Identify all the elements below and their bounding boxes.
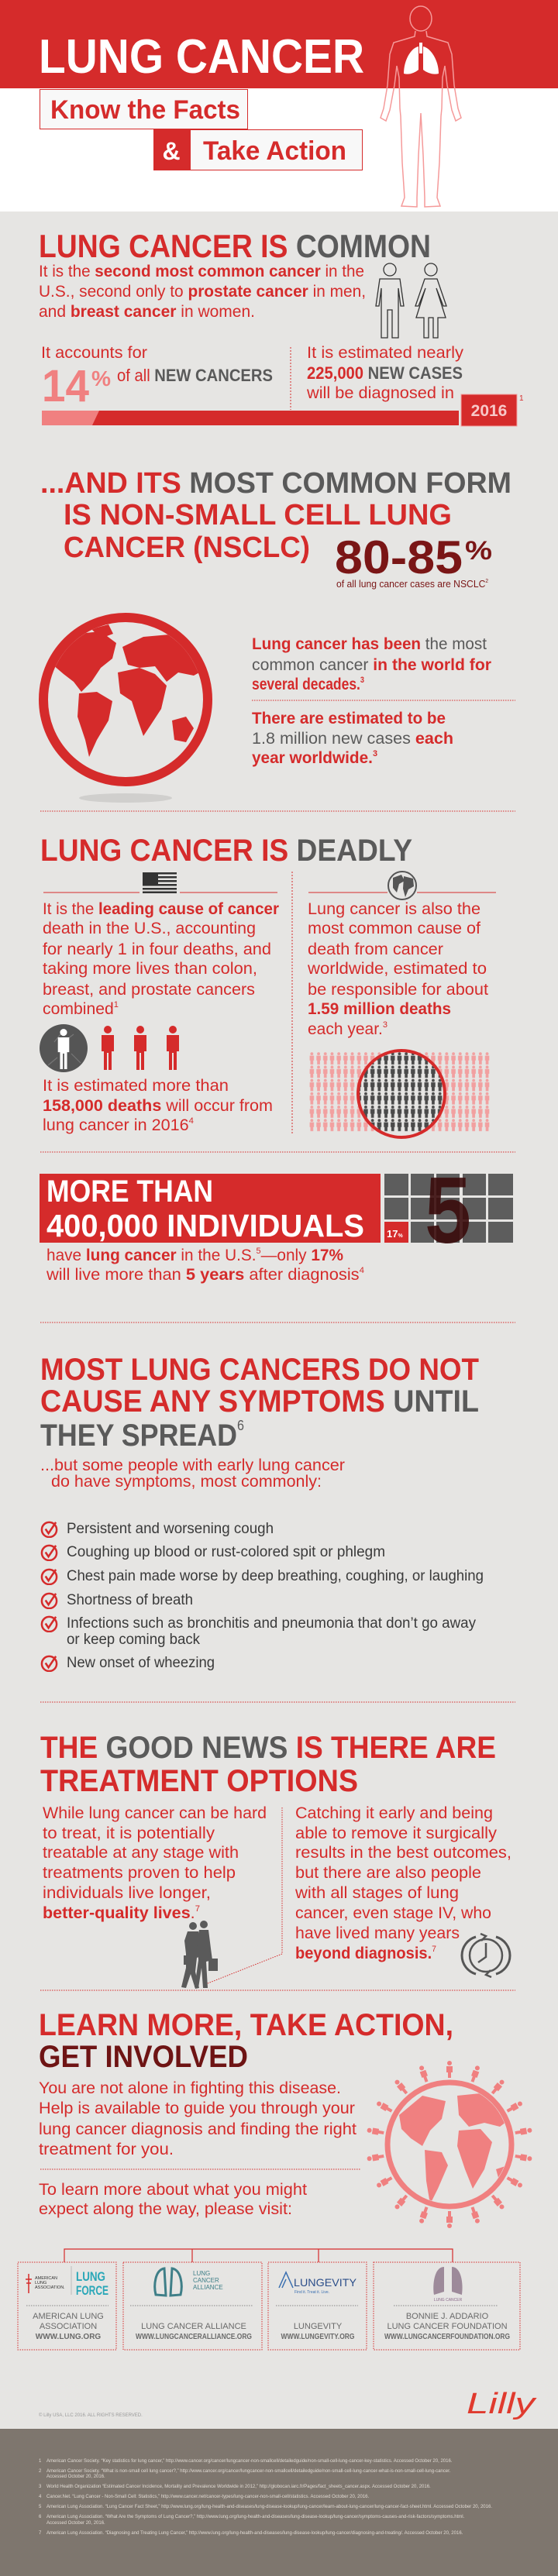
org box: Lung Cancer Alliance: WWW.LUNGCANCERALLIANCE.ORG [136,2333,252,2341]
org box: American Lung Association: LUNG [35,2281,46,2285]
text: leading cause of cancer death in US: for nearly 1 in four deaths, and [43,941,271,958]
text: second most common [39,263,366,321]
text: 1.8 million new cases: year worldwide. [252,749,374,767]
text: catching it early: Catching it early and being [295,1804,493,1822]
subtitle box: & Take Action [153,129,363,170]
heading: lung cancer is deadly: LUNG CANCER IS DEADLY [40,834,412,868]
icon: US flag [43,872,277,893]
org box: LUNGevity [268,2262,367,2350]
copyright: © Lilly USA, LLC 2016. ALL RIGHTS RESERVED. [39,2413,143,2418]
references: 6 [39,2515,42,2519]
heading: NSCLC [40,467,512,564]
heading: learn more [39,2008,453,2074]
text: 17% survive 5 years: —only [261,1247,311,1264]
text: catching it early: beyond diagnosis. [295,1945,432,1962]
text: potentially treatable: better-quality lives. [43,1904,195,1922]
org box: American Lung Association: FORCE [76,2283,108,2298]
heading: good news [40,1731,496,1798]
references: Cancer.Net. “Lung Cancer - Non-Small Cell: Statistics,” http://www.cancer.net/cancer-types/lung-cancer-non-small-cell/statistics. Accessed October 20, 2016. [46,2495,370,2499]
text: catching it early: able to remove it surgically [295,1825,498,1842]
text: second most common: It is the second most common cancer in the [39,263,364,280]
org box: American Lung Association [18,2262,116,2350]
text: 158,000 deaths: 4 [189,1116,194,1126]
text: potentially treatable: While lung cancer can be hard [43,1804,267,1822]
subtitle box: Know the Facts: Know the Facts [50,95,240,125]
text: some have symptoms [40,1457,345,1491]
text: potentially treatable: treatable at any stage with [43,1844,239,1862]
stat: 14% of new cancers: 14 [42,361,89,411]
org box: Lung Cancer Alliance: LUNG [193,2270,210,2277]
references: 3 [39,2485,42,2489]
org box: Lung Cancer Alliance: CANCER [193,2277,219,2284]
text: catching it early: 7 [432,1945,436,1954]
list: symptoms: Chest pain made worse by deep breathing, coughing, or laughing [67,1568,484,1584]
stat: 14% of new cancers: % [91,366,111,390]
list: symptoms: New onset of wheezing [67,1655,215,1671]
stat: 80-85%: % [465,536,492,566]
text: most common cancer in world [252,635,491,693]
org box: Bonnie J. Addario Lung Cancer Foundation: WWW.LUNGCANCERFOUNDATION.ORG [384,2333,510,2341]
text: you are not alone [39,2079,356,2158]
text: you are not alone: You are not alone in fighting this disease. [39,2079,341,2097]
references: Accessed October 20, 2016. [46,2475,105,2479]
org box: American Lung Association: AMERICAN LUNG [33,2312,104,2321]
chart: population grid with highlighted circle [308,1051,491,1137]
text: 158,000 deaths [43,1077,273,1134]
org box: LUNGevity: Find it. Treat it. Live. [294,2290,329,2295]
heading: good news: TREATMENT OPTIONS [40,1764,358,1798]
badge: 2016: 1 [519,394,524,403]
org box: LUNGevity: LUNGEVITY [294,2322,343,2331]
references: American Cancer Society. “What is non-small cell lung cancer?,” http://www.cancer.org/cancer/lungcancer-non-smallcell/detailedguide/non-small-cell-lung-cancer-what-is-non-small-cell-lung-cancer. [46,2469,451,2474]
org box: American Lung Association: LUNG [76,2269,105,2284]
stat: 80-85% [335,531,492,590]
stat: 14% of new cancers [41,344,273,411]
org box: LUNGevity: WWW.LUNGEVITY.ORG [281,2333,355,2341]
icon: body outline with lungs [381,6,461,207]
heading: symptoms: MOST LUNG CANCERS DO NOT [40,1353,479,1387]
text: 158,000 deaths: It is estimated more than [43,1077,229,1095]
graphic: 5-year grid: 5 [425,1157,471,1263]
badge: 2016 [461,394,524,426]
header band [0,0,558,212]
heading: NSCLC: CANCER (NSCLC) [64,531,310,564]
stat: 80-85%: of all lung cancer cases are NSCLC [336,578,496,590]
banner: more than 400,000 individuals [40,1174,381,1243]
stat: 80-85%: 80-85 [335,531,463,583]
org box: Bonnie J. Addario Lung Cancer Foundation: LUNG CANCER FOUNDATION [387,2322,508,2331]
references: American Lung Association. “What Are the Symptoms of Lung Cancer?,” http://www.lung.org/lung-health-and-diseases/lung-disease-lookup/lung-cancer/symptoms-causes-and-risk-factors/symptoms.html. [46,2515,465,2519]
stat: 14% of new cancers: It accounts for [41,344,147,362]
heading: learn more: LEARN MORE, TAKE ACTION, [39,2008,453,2042]
references: American Lung Association. “Diagnosing and Treating Lung Cancer,” http://www.lung.org/lung-health-and-diseases/lung-disease-lookup/lung-cancer/diagnosing-and-treating/. Accessed October 20, 2016. [46,2531,463,2536]
title: LUNG CANCER [39,30,364,84]
stat: 80-85%: 2 [485,579,488,584]
text: 17% survive 5 years: 5 [257,1247,261,1256]
text: leading cause of cancer death in US: breast, and prostate cancers [43,981,255,999]
stat: 14% of new cancers: of all NEW CANCERS [117,366,273,385]
text: most common cancer in world: several decades. [252,676,382,693]
text: 1.8 million new cases [252,710,453,767]
heading: NSCLC: ...AND ITS MOST COMMON FORM [40,467,512,500]
text: worldwide deaths: 3 [383,1020,388,1030]
text: leading cause of cancer death in US: taking more lives than colon, [43,960,257,978]
references: 2 [39,2469,42,2474]
org box: American Lung Association: ASSOCIATION. [35,2285,65,2290]
heading: learn more: GET INVOLVED [39,2040,248,2074]
references: 1 [39,2459,42,2464]
text: you are not alone: treatment for you. [39,2141,174,2158]
stat: 225,000 new cases [306,344,464,402]
text: potentially treatable: 7 [195,1904,200,1914]
stat: 225,000 new cases: will be diagnosed in [306,384,454,402]
references: 4 [39,2495,42,2499]
banner: more than 400,000 individuals: 400,000 INDIVIDUALS [46,1208,364,1243]
text: you are not alone: Help is available to guide you through your [39,2100,355,2117]
text: worldwide deaths: worldwide, estimated to [307,960,487,978]
references: 7 [39,2531,42,2536]
text: 17% survive 5 years: 4 [360,1266,364,1275]
references [39,2459,492,2536]
banner: more than 400,000 individuals: MORE THAN [46,1175,213,1209]
org box: Lung Cancer Alliance: ALLIANCE [193,2284,223,2291]
subtitle box: & Take Action: Take Action [203,136,346,166]
heading: lung cancer is common: LUNG CANCER IS COMMON [39,228,431,264]
text: 17% survive 5 years: will live more than 5 years after diagnosis [46,1266,355,1284]
icon: small globe [308,872,496,899]
references: American Lung Association. “Lung Cancer Fact Sheet,” http://www.lung.org/lung-health-and-diseases/lung-disease-lookup/lung-cancer/learn-about-lung-cancer/lung-cancer-fact-sheet.html. Accessed October 20, 2016. [46,2505,492,2509]
text: catching it early: cancer, even stage IV, who [295,1904,491,1922]
text: leading cause of cancer death in US: 1 [114,1000,119,1009]
text: potentially treatable: to treat, it is potentially [43,1825,215,1842]
text: most common cancer in world: common cancer in the world for [252,656,491,674]
list: symptoms: Coughing up blood or rust-colored spit or phlegm [67,1544,385,1560]
text: catching it early: have lived many years [295,1924,460,1942]
icon: clock [462,1934,510,1977]
text: catching it early: with all stages of lung [294,1884,459,1902]
heading: symptoms: THEY SPREAD [40,1419,260,1453]
text: potentially treatable: treatments proven to help [43,1864,236,1882]
text: you are not alone: lung cancer diagnosis and finding the right [39,2120,356,2138]
graphic: 5-year grid [384,1157,513,1263]
list: symptoms: Shortness of breath [67,1592,193,1608]
references: 5 [39,2505,42,2509]
heading: symptoms [40,1353,479,1453]
icon: walking couple [181,1921,218,1989]
text: most common cancer in world: Lung cancer has been the most [252,635,487,653]
text: leading cause of cancer death in US: It is the leading cause of cancer [43,900,279,918]
list: symptoms: or keep coming back [67,1632,200,1648]
text: potentially treatable: individuals live longer, [43,1884,211,1902]
text: 17% survive 5 years: 17% [311,1247,343,1264]
references: Accessed October 20, 2016. [46,2521,105,2526]
heading: NSCLC: IS NON-SMALL CELL LUNG [64,499,452,531]
text: leading cause of cancer death in US: death in the U.S., accounting [43,920,256,937]
subtitle box: Know the Facts [40,90,248,129]
list: symptoms: Infections such as bronchitis and pneumonia that don’t go away [67,1615,476,1632]
text: worldwide deaths: death from cancer [308,941,443,958]
heading: symptoms: 6 [237,1418,244,1433]
heading: good news: THE GOOD NEWS IS THERE ARE [40,1731,496,1765]
org box: LUNGevity: LUNGEVITY [294,2276,357,2289]
stat: 225,000 new cases: 225,000 NEW CASES [307,363,463,383]
text: 158,000 deaths: 158,000 deaths will occur from [43,1097,273,1115]
text: leading cause of cancer death in US: combined [43,1000,113,1018]
org box: Bonnie J. Addario Lung Cancer Foundation [374,2262,520,2350]
references: American Cancer Society. “Key statistics for lung cancer,” http://www.cancer.org/cancer/lungcancer-non-smallcell/detailedguide/non-small-cell-lung-cancer-key-statistics. Accessed October 20, 2016. [46,2459,453,2464]
icon: world globe [43,617,211,803]
text: some have symptoms: do have symptoms, most commonly: [51,1473,322,1491]
org box: American Lung Association: ASSOCIATION [40,2322,97,2331]
list: symptoms [42,1521,484,1671]
text: worldwide deaths: Lung cancer is also the [308,900,480,918]
badge: 2016: 2016 [471,402,507,420]
icon: man and woman [376,263,446,338]
subtitle box: & Take Action: & [162,137,181,165]
text: to learn more [39,2181,307,2218]
footer background [0,2429,558,2576]
logo: Lilly: Lilly [467,2388,537,2420]
list: symptoms: Persistent and worsening cough [67,1521,274,1537]
org box: American Lung Association: WWW.LUNG.ORG [36,2333,101,2341]
heading: symptoms: CAUSE ANY SYMPTOMS UNTIL [40,1384,479,1419]
graphic: 5-year grid: 17% [387,1228,403,1240]
text: to learn more: expect along the way, please visit: [39,2200,292,2218]
text: second most common: U.S., second only to prostate cancer in men, [39,283,366,301]
text: 1.8 million new cases: 1.8 million new cases each [252,730,453,748]
icon: globe ringed with people [367,2061,532,2228]
text: 17% survive 5 years: have lung cancer in the U.S. [46,1247,257,1264]
text: catching it early: but there are also people [295,1864,481,1882]
text: 1.8 million new cases: 3 [373,749,377,758]
text: catching it early: results in the best outcomes, [295,1844,512,1862]
org box: Lung Cancer Alliance: LUNG CANCER ALLIANCE [141,2322,246,2331]
text: 17% survive 5 years [46,1247,364,1284]
text: to learn more: To learn more about what you might [39,2181,307,2199]
icon: 1 in 4 people [40,1024,179,1072]
text: leading cause of cancer death in US [43,900,279,1018]
bar: 14% share [42,411,459,425]
text: some have symptoms: ...but some people with early lung cancer [40,1457,345,1474]
text: worldwide deaths: be responsible for about [308,981,488,999]
text: catching it early [294,1804,512,1962]
org box: Lung Cancer Alliance [123,2262,262,2350]
text: most common cancer in world: 3 [360,676,364,685]
references: World Health Organization “Estimated Cancer Incidence, Mortality and Prevalence Worldwide in 2012,” http://globocan.iarc.fr/Pages/fact_sheets_cancer.aspx. Accessed October 20, 2016. [46,2485,431,2489]
stat: 225,000 new cases: It is estimated nearly [307,344,464,362]
org box: Bonnie J. Addario Lung Cancer Foundation: LUNG CANCER [434,2298,463,2303]
org box: Bonnie J. Addario Lung Cancer Foundation: BONNIE J. ADDARIO [406,2312,489,2321]
text: worldwide deaths: 1.59 million deaths [308,1000,451,1018]
text: 1.8 million new cases: There are estimated to be [252,710,446,727]
text: worldwide deaths: most common cause of [308,920,480,937]
text: worldwide deaths [307,900,488,1038]
connector: dotted line to couple [208,1807,282,1983]
connector: org tree lines [64,2249,453,2262]
text: worldwide deaths: each year. [308,1020,383,1038]
org box: American Lung Association: AMERICAN [35,2276,57,2281]
text: potentially treatable [43,1804,267,1922]
text: second most common: and breast cancer in women. [39,303,255,321]
text: 158,000 deaths: lung cancer in 2016 [43,1116,184,1134]
